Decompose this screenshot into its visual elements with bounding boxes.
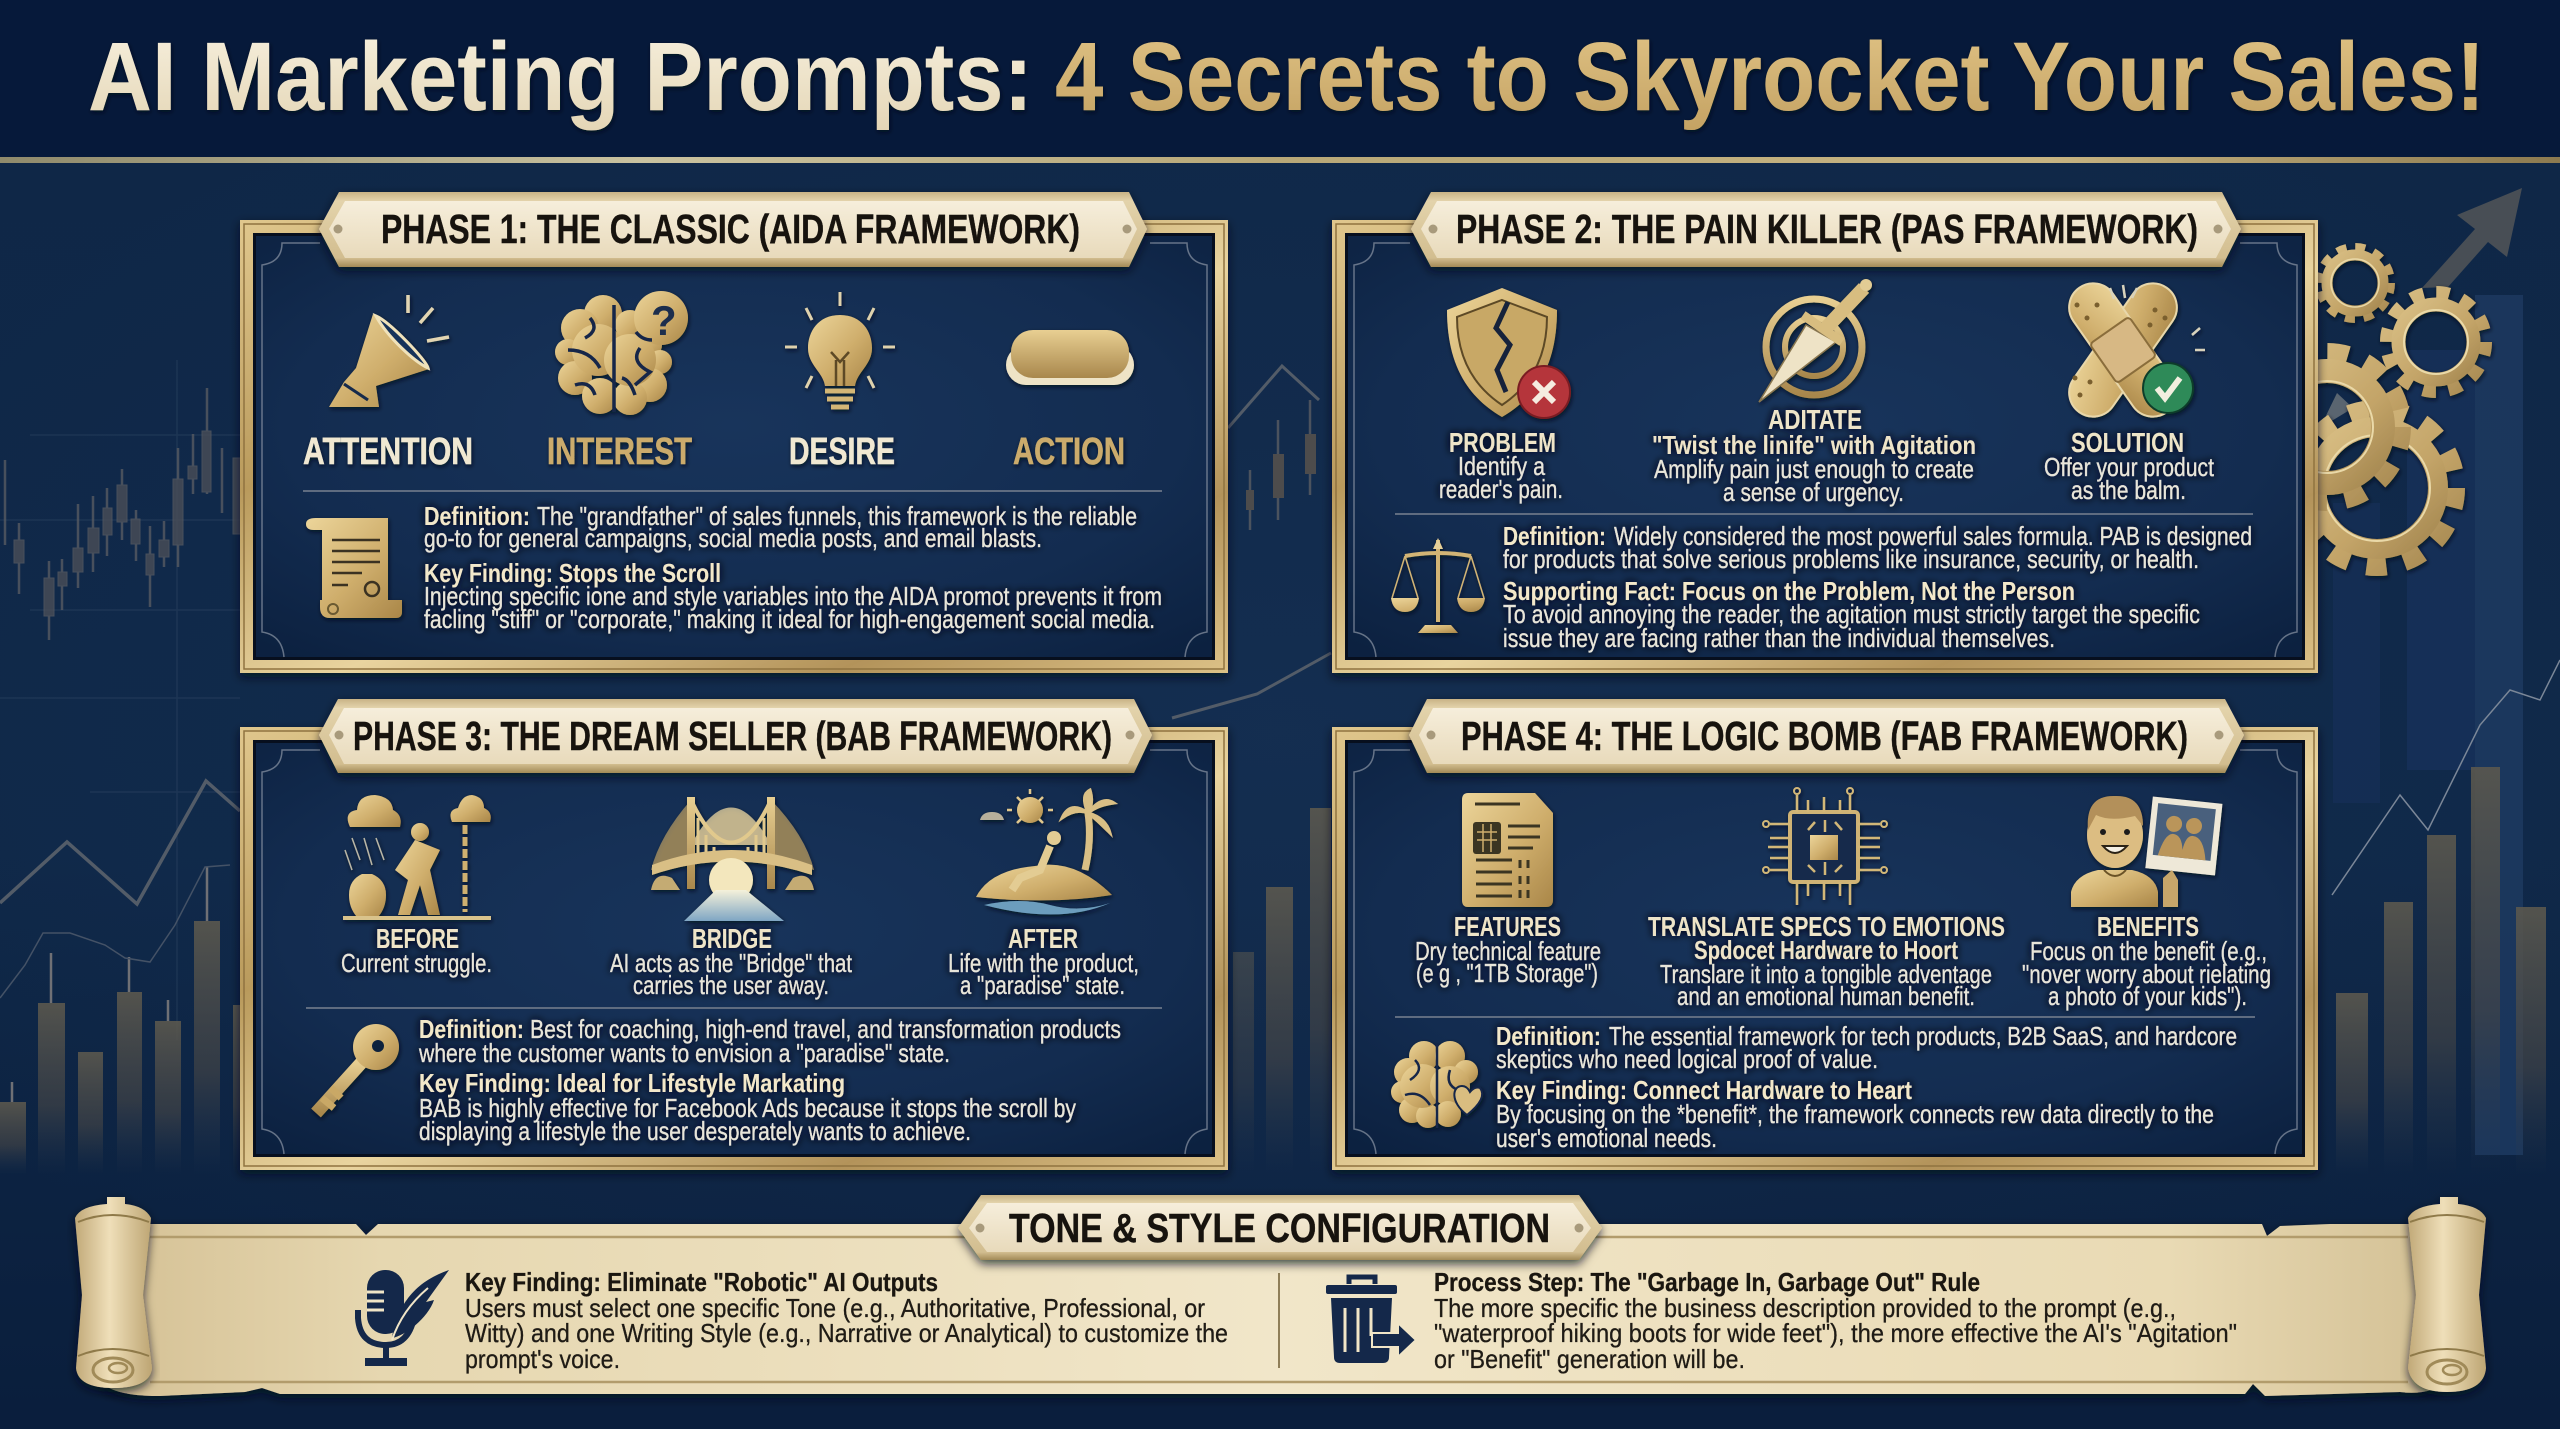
icon: megaphone — [329, 295, 449, 407]
text block: FAB definition and finding: user's emotional needs. — [1496, 1123, 1717, 1153]
icon: light bulb — [785, 292, 895, 407]
scroll right roll — [2408, 1197, 2486, 1392]
column: problem: reader's pain. — [1439, 474, 1563, 504]
heading: tone and style: TONE & STYLE CONFIGURATION — [1009, 1205, 1550, 1251]
column: solution: as the balm. — [2071, 475, 2186, 505]
scroll left roll — [75, 1197, 152, 1388]
panel: phase 3 BAB — [240, 699, 1228, 1170]
column: problem — [1439, 427, 1563, 504]
AIDA labels: INTEREST — [547, 431, 692, 473]
AIDA labels: ATTENTION — [303, 431, 473, 473]
text block: garbage in garbage out: Process Step: The "Garbage In, Garbage Out" Rule — [1434, 1267, 1980, 1297]
icon: microphone and quill — [358, 1270, 449, 1366]
heading: phase 2: PHASE 2: THE PAIN KILLER (PAS FRAMEWORK) — [1456, 206, 2198, 252]
column: translate: and an emotional human benefit. — [1677, 981, 1975, 1011]
column: solution: Offer your product — [2044, 452, 2215, 482]
column: after: AFTER — [1008, 923, 1078, 954]
text block: AIDA definition and finding: The "grandfather" of sales funnels, this framework is the reliable — [537, 501, 1137, 531]
text block: eliminate robotic outputs: Users must select one specific Tone (e.g., Authoritative, Professional, or — [465, 1293, 1205, 1323]
column: after: Life with the product, — [948, 948, 1139, 978]
text block: FAB definition and finding — [1496, 1021, 2237, 1153]
column: features: (e g , "1TB Storage") — [1416, 958, 1598, 988]
heading: phase 1 — [319, 192, 1147, 267]
column: before: BEFORE — [376, 923, 459, 954]
text block: PAS definition and fact: Definition: — [1503, 521, 1606, 551]
column: translate — [1648, 911, 2005, 1011]
text block: FAB definition and finding: The essential framework for tech products, B2B SaaS, and hardcore — [1609, 1021, 2237, 1051]
background chart: left bars — [0, 867, 241, 1174]
column: benefits: a photo of your kids"). — [2048, 981, 2247, 1011]
heading: phase 3 — [319, 699, 1152, 773]
FAB labels — [1415, 911, 2271, 1011]
text block: garbage in garbage out: or "Benefit" generation will be. — [1434, 1344, 1745, 1374]
column: agitate — [1652, 404, 1976, 507]
text block: garbage in garbage out: The more specific the business description provided to the prompt (e.g., — [1434, 1293, 2176, 1323]
heading: phase 4 — [1409, 699, 2244, 773]
column: problem: Identify a — [1458, 451, 1545, 481]
text block: PAS definition and fact — [1503, 521, 2252, 653]
scroll paper — [100, 1224, 2450, 1396]
text block: eliminate robotic outputs — [465, 1267, 1228, 1374]
text block: BAB definition and finding: Best for coaching, high-end travel, and transformation products — [530, 1014, 1121, 1044]
panel: phase 4 FAB — [1332, 699, 2318, 1170]
text block: BAB definition and finding — [418, 1014, 1121, 1146]
AIDA labels: DESIRE — [789, 431, 895, 473]
column: agitate: "Twist the linife" with Agitation — [1652, 430, 1976, 460]
text block: PAS definition and fact: issue they are facing rather than the individual themselves. — [1503, 623, 2055, 653]
column: before: Current struggle. — [341, 948, 492, 978]
panel: tone and style scroll — [75, 1195, 2486, 1396]
column: after — [948, 923, 1139, 1000]
column: benefits — [2022, 911, 2271, 1011]
panel: phase 2 PAS — [1332, 192, 2318, 673]
background chart: left candlesticks — [5, 388, 241, 640]
column: features — [1415, 911, 1601, 988]
text block: PAS definition and fact: for products that solve serious problems like insurance, security, or health. — [1503, 544, 2199, 574]
column: bridge: carries the user away. — [633, 970, 829, 1000]
icon: brain with question mark — [555, 291, 688, 415]
AIDA labels: ACTION — [1013, 431, 1125, 473]
text block: AIDA definition and finding: Injecting specific ione and style variables into the AIDA promot prevents it from — [424, 581, 1162, 611]
text block: FAB definition and finding: Definition: — [1496, 1021, 1601, 1051]
text block: FAB definition and finding: Key Finding: Connect Hardware to Heart — [1496, 1075, 1912, 1105]
column: agitate: a sense of urgency. — [1723, 477, 1904, 507]
gold title rule — [0, 157, 2560, 163]
text block: PAS definition and fact: To avoid annoying the reader, the agitation must strictly target the specific — [1503, 599, 2200, 629]
text block: BAB definition and finding: where the customer wants to envision a "paradise" state. — [418, 1038, 950, 1068]
heading: phase 4: PHASE 4: THE LOGIC BOMB (FAB FRAMEWORK) — [1461, 713, 2188, 759]
icon: brain with heart — [1391, 1041, 1482, 1128]
icon: balance scales — [1391, 538, 1485, 633]
column: translate: Translare it into a tongible adventage — [1660, 959, 1992, 989]
text block: eliminate robotic outputs: prompt's voice. — [465, 1344, 620, 1374]
icon: brain with question mark: ? — [651, 297, 677, 344]
icon: document scroll — [306, 518, 402, 618]
column: bridge: BRIDGE — [692, 923, 772, 954]
title: AI Marketing Prompts: — [88, 22, 1033, 131]
column: translate: TRANSLATE SPECS TO EMOTIONS — [1648, 911, 2005, 942]
column: benefits: "nover worry about rielating — [2022, 959, 2271, 989]
icon: circuit chip — [1763, 788, 1887, 905]
icon: gears and growth arrow — [2252, 188, 2522, 567]
text block: eliminate robotic outputs: Key Finding: Eliminate "Robotic" AI Outputs — [465, 1267, 938, 1297]
column: benefits: Focus on the benefit (e.g., — [2030, 936, 2267, 966]
icon: after paradise — [976, 789, 1114, 915]
column: agitate: ADITATE — [1768, 404, 1862, 435]
background chart: right side — [2332, 295, 2560, 1174]
column: agitate: Amplify pain just enough to create — [1654, 454, 1974, 484]
text block: FAB definition and finding: skeptics who need logical proof of value. — [1496, 1044, 1878, 1074]
text block: BAB definition and finding: Key Finding: Ideal for Lifestyle Markating — [419, 1068, 845, 1098]
icon: cracked shield — [1447, 288, 1570, 418]
column: bridge: AI acts as the "Bridge" that — [610, 948, 853, 978]
text block: BAB definition and finding: displaying a lifestyle the user desperately wants to achieve. — [419, 1116, 971, 1146]
text block: AIDA definition and finding: facling "stiff" or "corporate," making it ideal for high-engagement social media. — [424, 604, 1155, 634]
icon: spec document — [1462, 793, 1553, 907]
background chart: center gap — [1172, 366, 1331, 1174]
text block: BAB definition and finding: BAB is highly effective for Facebook Ads because it stops the scroll by — [419, 1093, 1076, 1123]
PAS labels — [1439, 404, 2215, 507]
column: features: FEATURES — [1454, 911, 1561, 942]
column: benefits: BENEFITS — [2097, 911, 2199, 942]
background chart: left lines — [0, 781, 240, 998]
BAB labels — [341, 923, 1139, 1000]
column: solution — [2044, 427, 2215, 505]
icon: man with family photo — [2071, 796, 2222, 907]
column: features: Dry technical feature — [1415, 936, 1601, 966]
column: problem: PROBLEM — [1449, 427, 1556, 458]
text block: FAB definition and finding: By focusing on the *benefit*, the framework connects rew data directly to the — [1496, 1099, 2214, 1129]
column: translate: Spdocet Hardware to Hoort — [1694, 935, 1958, 965]
icon: before struggle — [343, 795, 491, 920]
icon: crossed bandages — [2060, 274, 2205, 426]
column: solution: SOLUTION — [2071, 427, 2184, 458]
AIDA labels — [303, 431, 1125, 473]
text block: AIDA definition and finding: Key Finding: Stops the Scroll — [424, 558, 721, 588]
text block: garbage in garbage out: "waterproof hiking boots for wide feet"), the more effective the AI's "Agitation" — [1434, 1318, 2237, 1348]
title — [88, 22, 2485, 131]
heading: phase 2 — [1411, 192, 2241, 267]
column: before — [341, 923, 492, 978]
column: bridge — [610, 923, 853, 1000]
icon: dagger and target — [1759, 279, 1872, 402]
heading: phase 1: PHASE 1: THE CLASSIC (AIDA FRAMEWORK) — [381, 206, 1080, 252]
text block: PAS definition and fact: Supporting Fact: Focus on the Problem, Not the Person — [1503, 576, 2075, 606]
text block: eliminate robotic outputs: Witty) and one Writing Style (e.g., Narrative or Analytical) to customize the — [465, 1318, 1228, 1348]
heading: phase 3: PHASE 3: THE DREAM SELLER (BAB FRAMEWORK) — [353, 713, 1112, 759]
icon: trash bin with arrow — [1326, 1277, 1416, 1363]
text block: AIDA definition and finding: go-to for general campaigns, social media posts, and email blasts. — [424, 523, 1042, 553]
icon: action button — [1006, 330, 1134, 385]
text block: AIDA definition and finding: Definition: — [424, 501, 530, 531]
text block: AIDA definition and finding — [424, 501, 1162, 634]
text block: garbage in garbage out — [1434, 1267, 2237, 1374]
column: after: a "paradise" state. — [960, 970, 1125, 1000]
icon: key — [316, 1024, 399, 1113]
text block: PAS definition and fact: Widely considered the most powerful sales formula. PAB is designed — [1614, 521, 2252, 551]
panel: phase 1 AIDA — [240, 192, 1228, 673]
heading: tone and style — [958, 1195, 1602, 1260]
text block: BAB definition and finding: Definition: — [419, 1014, 524, 1044]
icon: bridge — [651, 797, 814, 921]
